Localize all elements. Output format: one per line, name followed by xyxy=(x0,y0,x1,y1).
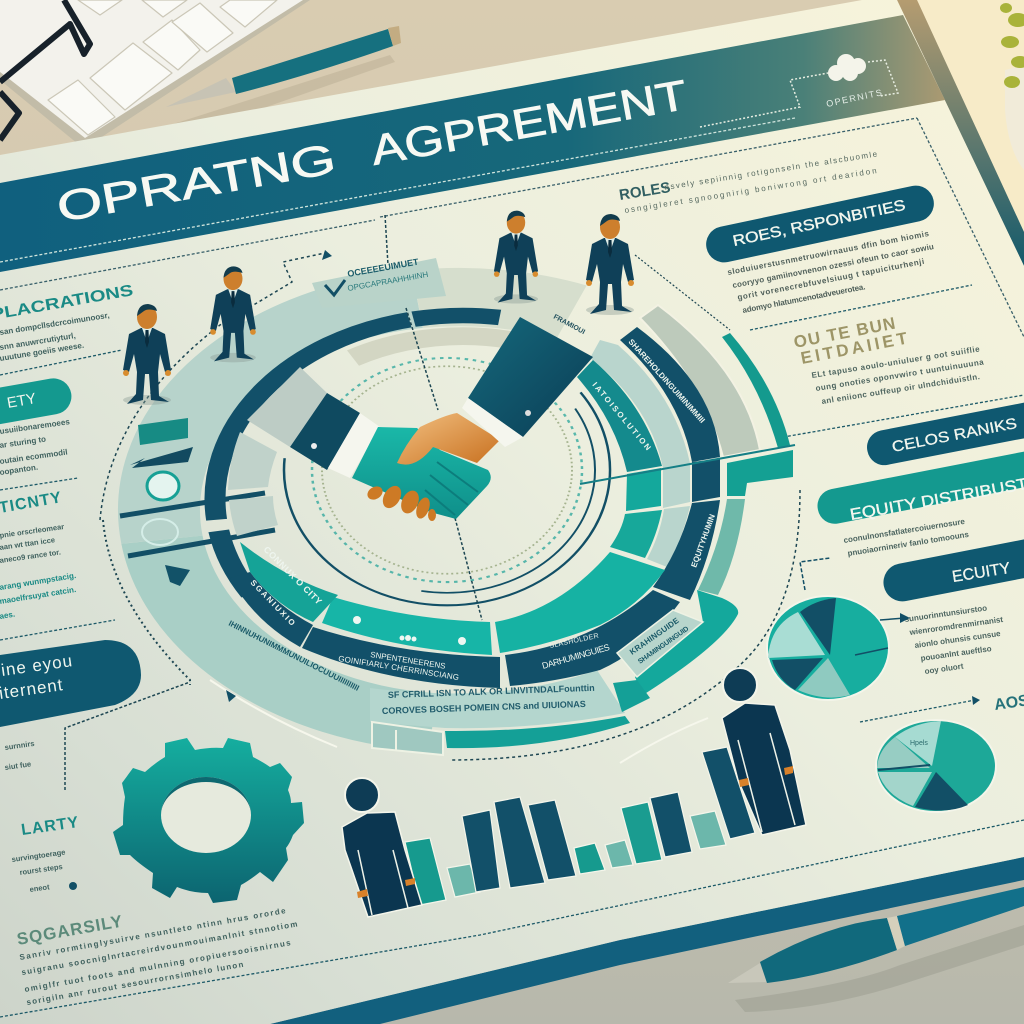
right panel: roles heading: ROLES xyxy=(618,179,672,204)
dark lower segment xyxy=(505,590,680,686)
icon: pen bottom xyxy=(728,887,1024,1012)
text block: ecuity: aionlo ohunsis cunsue xyxy=(914,629,1002,650)
orange hand xyxy=(397,413,500,465)
pie chart 1 xyxy=(767,558,910,700)
text block: ety: outain ecommodil xyxy=(0,448,68,466)
ring labels: FRAMIOUI xyxy=(552,314,586,336)
large figure right xyxy=(722,668,806,835)
outer ring: bottom light band xyxy=(370,670,625,728)
dark ring top left xyxy=(123,247,803,751)
lower left text xyxy=(4,739,80,894)
bar chart xyxy=(405,747,755,905)
ring labels: SHAMINGUINGUID xyxy=(637,625,690,666)
outer ring: teal arc xyxy=(722,333,790,448)
icon: glasses xyxy=(0,0,90,140)
text block: roles: sloduiuerstusnmetruowirnauus dfin bom hiomis xyxy=(727,229,930,277)
outer ring: teal block xyxy=(727,450,793,496)
ring labels: DARHUMINGUIES xyxy=(541,642,611,671)
text block: sqgarsily: omiglfr tuot foots and mulnning oropiuersooisnirnus xyxy=(24,938,292,994)
text block: sqgarsily xyxy=(15,906,298,1007)
logo: OPERNITS xyxy=(825,87,884,109)
text block: distribution: pnuoiaornineriv fanlo tomoouns xyxy=(847,530,970,558)
text block: roles: gorit vorenecrebfuvelsiuug t tapuiciturhenji xyxy=(737,257,925,302)
right lower stack xyxy=(610,510,662,558)
pill: celos ranks: CELOS RANIKS xyxy=(891,415,1018,456)
text block: ety: ar sturing to xyxy=(0,435,47,450)
text block: out te bun: ELt tapuso aoulo-uniuluer g oot suiiflie xyxy=(811,344,981,380)
pill: ine eyou xyxy=(0,640,141,727)
text block: ety: oopanton. xyxy=(0,463,39,477)
bottom teal segment xyxy=(322,597,492,655)
outer ring: top right grey segment xyxy=(640,305,760,457)
outer ring: bottom teal band xyxy=(445,716,630,748)
title xyxy=(53,71,691,231)
lower left text: survingtoerage xyxy=(11,848,66,864)
outer ring: lower right teal segment xyxy=(635,590,738,695)
callout: check box: OCEEEEUIMUET xyxy=(347,257,420,279)
text block: out te bun: oung onoties oponvwiro t uuntuinuuuna xyxy=(815,357,985,393)
ring labels: GOINIFIARLY CHERRINSCIANG xyxy=(338,654,460,682)
text block: ecuity: pouoanlnt aueftlso xyxy=(920,644,992,663)
text block: sqgarsily: Sanriv rormtinglysuirve nsuntleto ntinn hrus ororde xyxy=(19,906,287,962)
text block: distribution: coonulnonsfatlatercoiuernosure xyxy=(843,517,966,545)
title: OPRATNG xyxy=(53,135,339,231)
ring labels: SGANIUXIO xyxy=(249,578,297,628)
inner thin rings xyxy=(220,282,674,658)
text block: sqgarsily: sorigiln anr rurout sesourrornsimhelo lunon xyxy=(26,960,244,1007)
handshake xyxy=(290,317,593,521)
lower left teal segment xyxy=(240,542,338,622)
icon: gear xyxy=(113,738,304,903)
text block: ecuity xyxy=(904,603,1004,676)
right panel: roles heading: osngigleret sgnoognirig boniwrong ort dearidon xyxy=(624,166,877,215)
ring labels xyxy=(227,314,717,716)
icon: keyboard xyxy=(0,0,310,146)
icon: block xyxy=(165,565,190,586)
text block: sqgarsily: suigranu soocniglnrtacreirdvounmouimanlnit stnnotiom xyxy=(21,919,298,977)
heading and text: ticnty: aan wt ttan icce xyxy=(0,535,56,552)
pie chart 2 xyxy=(876,720,996,812)
outer ring: light teal right segment xyxy=(698,499,745,595)
text block: ecuity: ooy oluort xyxy=(924,662,964,676)
teal segment marks xyxy=(353,616,466,645)
ring labels: SNPENTENEERENS xyxy=(370,650,446,671)
text block: out te bun: EITDAIIET xyxy=(799,329,909,368)
arrow xyxy=(226,690,236,702)
text block: ecuity: wienroromdrenmirnanist xyxy=(908,615,1004,637)
ring labels: IATOISOLUTION xyxy=(590,381,654,454)
left panel: placrations xyxy=(0,282,135,363)
left dividers xyxy=(120,493,275,556)
text block: out te bun: OU TE BUN xyxy=(792,314,897,352)
icon: swirl xyxy=(142,519,178,545)
teal hand xyxy=(352,427,491,519)
right mid stack xyxy=(692,459,720,502)
small teal box xyxy=(613,680,650,712)
pill: celos ranks xyxy=(864,397,1024,468)
right panel: roles heading: nsvely sepiinnig rotigonseln the alscbuomle xyxy=(664,149,878,192)
pill: ecuity xyxy=(880,535,1024,605)
ring labels: IHINNUHUNIMMMUNUILIOCUUUIIIIIIIIII xyxy=(227,619,361,693)
ring labels: SLASHOLDER xyxy=(549,633,599,650)
fingers xyxy=(365,483,436,521)
text block: ety: usuiibonaremoees xyxy=(0,417,71,436)
callout: check box: OPGCAPRAAHHHINH xyxy=(347,270,429,293)
text block: roles: adomyo hlatumcenotadveuerotea. xyxy=(742,282,866,315)
ring labels: COROVES BOSEH POMEIN CNS and UIUIONAS xyxy=(382,699,586,716)
grey left segments xyxy=(247,367,327,447)
text block: ety xyxy=(0,417,71,477)
heading and text: ticnty: pnie orscrleomear xyxy=(0,522,65,540)
pill: roles: ROES, RSPONBITIES xyxy=(731,197,907,250)
title band xyxy=(0,15,945,272)
pill: ecuity: ECUITY xyxy=(951,560,1012,586)
text block: sqgarsily: SQGARSILY xyxy=(15,912,125,949)
heading and text: ticnty: aneco9 rance tor. xyxy=(0,547,61,565)
right teal segment xyxy=(577,360,662,472)
lower left text: siut fue xyxy=(4,759,32,772)
text block: ecuity: sunuorinntunsiurstoo xyxy=(904,603,988,624)
big teal segment xyxy=(495,552,665,653)
icon: plant xyxy=(1000,3,1024,170)
ring labels: CONNUX O CITY xyxy=(262,544,324,607)
heading and text: ticnty xyxy=(0,489,77,621)
lower left text: LARTY xyxy=(20,814,80,839)
pill: ety: ETY xyxy=(6,390,37,412)
left panel: placrations: san dompcllsdcrcoimunoosr, xyxy=(0,311,110,337)
figures on the ring xyxy=(123,211,634,405)
icon: globe xyxy=(147,472,179,500)
grey text box xyxy=(617,610,703,677)
title: AGPREMENT xyxy=(367,71,691,174)
left cuff xyxy=(290,393,360,470)
small table box xyxy=(372,722,443,755)
left panel: placrations: snn anuwrcrutiyturl, xyxy=(0,331,76,352)
left panel: placrations: uuutune goeiis weese. xyxy=(0,341,85,363)
callout: check box xyxy=(312,257,446,308)
ring labels: EQUITYHUMIN xyxy=(689,513,717,569)
icon: ribbon xyxy=(130,447,193,468)
bottom dark segment xyxy=(302,627,500,688)
ring labels: KRAHINGUIDE xyxy=(628,616,681,657)
right sleeve xyxy=(468,317,593,437)
icon: book xyxy=(138,418,188,445)
ring labels: SHAREHOLDINGUIMINIMMIII xyxy=(627,337,707,425)
logo xyxy=(700,54,898,127)
pill: roles xyxy=(703,182,937,266)
outer ring of circular diagram xyxy=(120,269,798,751)
text block: roles: cooryyo gamiinovnenon ozessi ofeun to caor sowiu xyxy=(732,242,935,290)
lower left dark segment xyxy=(230,572,313,647)
text block: distribution xyxy=(843,517,970,558)
left ring icons xyxy=(130,418,193,586)
pill: equity distribution xyxy=(815,447,1024,527)
right dark segment xyxy=(620,327,720,462)
right grey segment xyxy=(590,340,690,468)
large figure left xyxy=(342,778,422,917)
lower left text: rourst steps xyxy=(19,862,63,877)
pill: equity distribution: EQUITY DISTRIBUST xyxy=(849,476,1024,524)
lower left text: surnnirs xyxy=(4,739,35,752)
heading and text: ticnty: arang wunmpstacig. xyxy=(0,571,77,592)
text block: roles xyxy=(727,229,935,315)
pill: ety xyxy=(0,376,74,430)
ring dividers and dashed leader lines xyxy=(65,215,800,790)
pill: ine eyou: ine eyou xyxy=(0,651,74,680)
text block: out te bun xyxy=(792,314,985,406)
ring labels: SF CFRILL ISN TO ALK OR LINVITNDALFounttin xyxy=(388,683,595,700)
text block: out te bun: anl eniionc ouffeup oir ulndchiduistln. xyxy=(821,372,980,406)
pie chart 2: Hpels xyxy=(910,740,928,747)
heading and text: ticnty: maoelfrsuyat catcin. xyxy=(0,585,77,606)
lower left text: eneot xyxy=(29,882,51,894)
inner rings of circular diagram xyxy=(123,247,803,751)
icon: pen top xyxy=(166,26,401,125)
